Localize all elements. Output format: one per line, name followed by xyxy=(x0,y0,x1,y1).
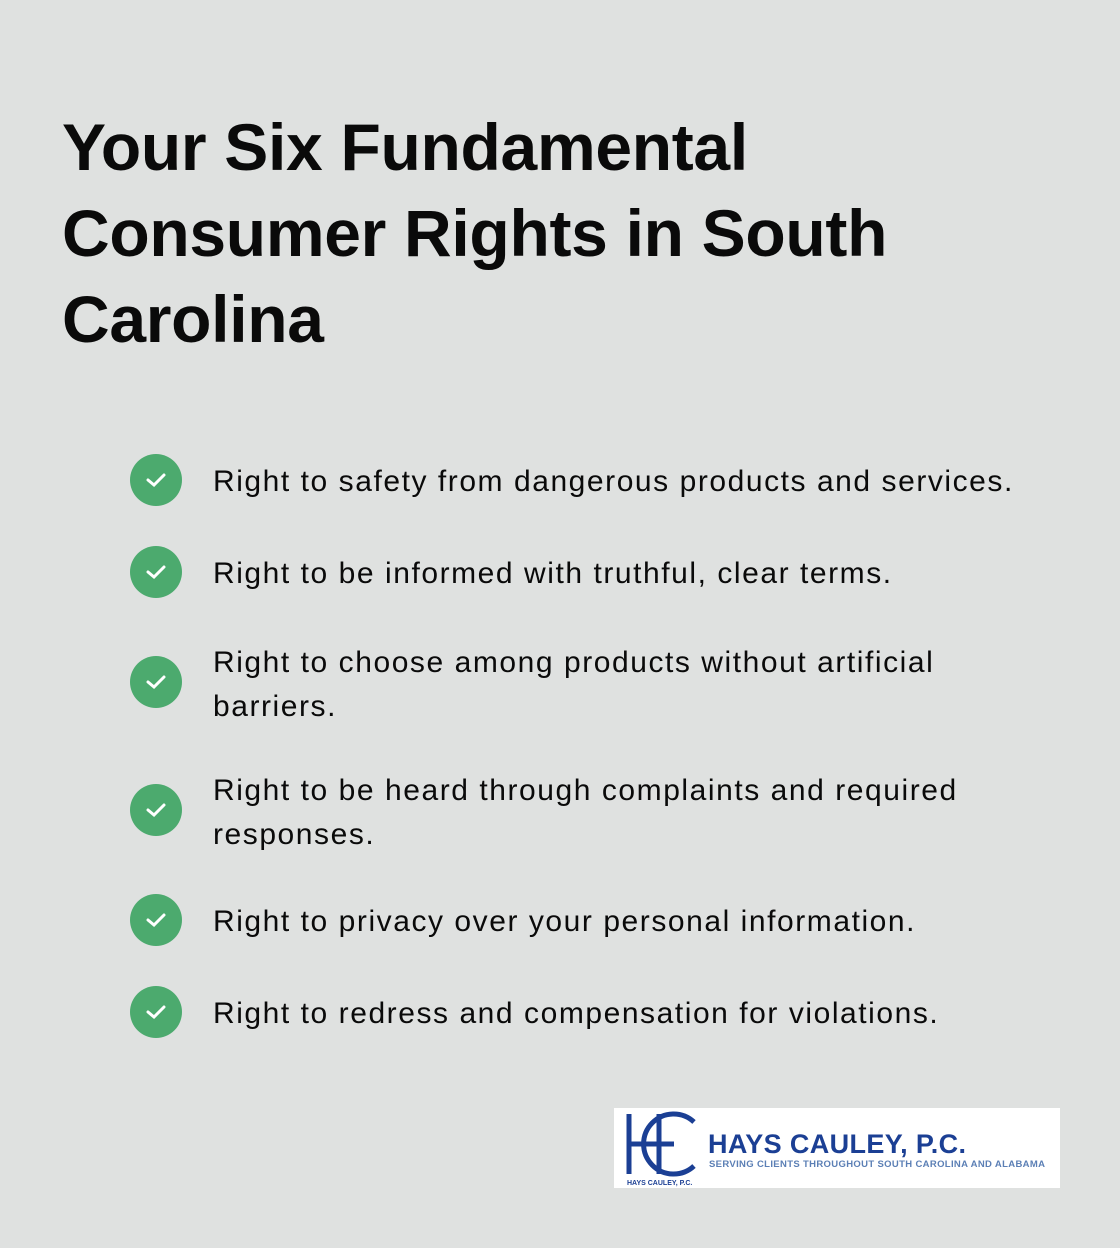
logo xyxy=(614,1108,1060,1188)
item 3: Right to choose among products without artificial barriers. xyxy=(213,646,934,723)
logo: HAYS CAULEY, P.C. xyxy=(627,1180,692,1187)
item 6: Right to redress and compensation for violations. xyxy=(213,997,939,1030)
item 4: Right to be heard through complaints and required responses. xyxy=(213,774,958,851)
item 2 xyxy=(130,546,893,598)
logo: HAYS CAULEY, P.C. xyxy=(708,1129,966,1159)
logo: SERVING CLIENTS THROUGHOUT SOUTH CAROLINA AND ALABAMA xyxy=(709,1159,1045,1170)
item 5 xyxy=(130,894,916,946)
item 1 xyxy=(130,454,1014,506)
item 6 xyxy=(130,986,939,1038)
item 5: Right to privacy over your personal information. xyxy=(213,905,916,938)
item 2: Right to be informed with truthful, clear terms. xyxy=(213,557,893,590)
item 1: Right to safety from dangerous products and services. xyxy=(213,465,1014,498)
title: Your Six Fundamental Consumer Rights in South Carolina xyxy=(62,110,887,356)
